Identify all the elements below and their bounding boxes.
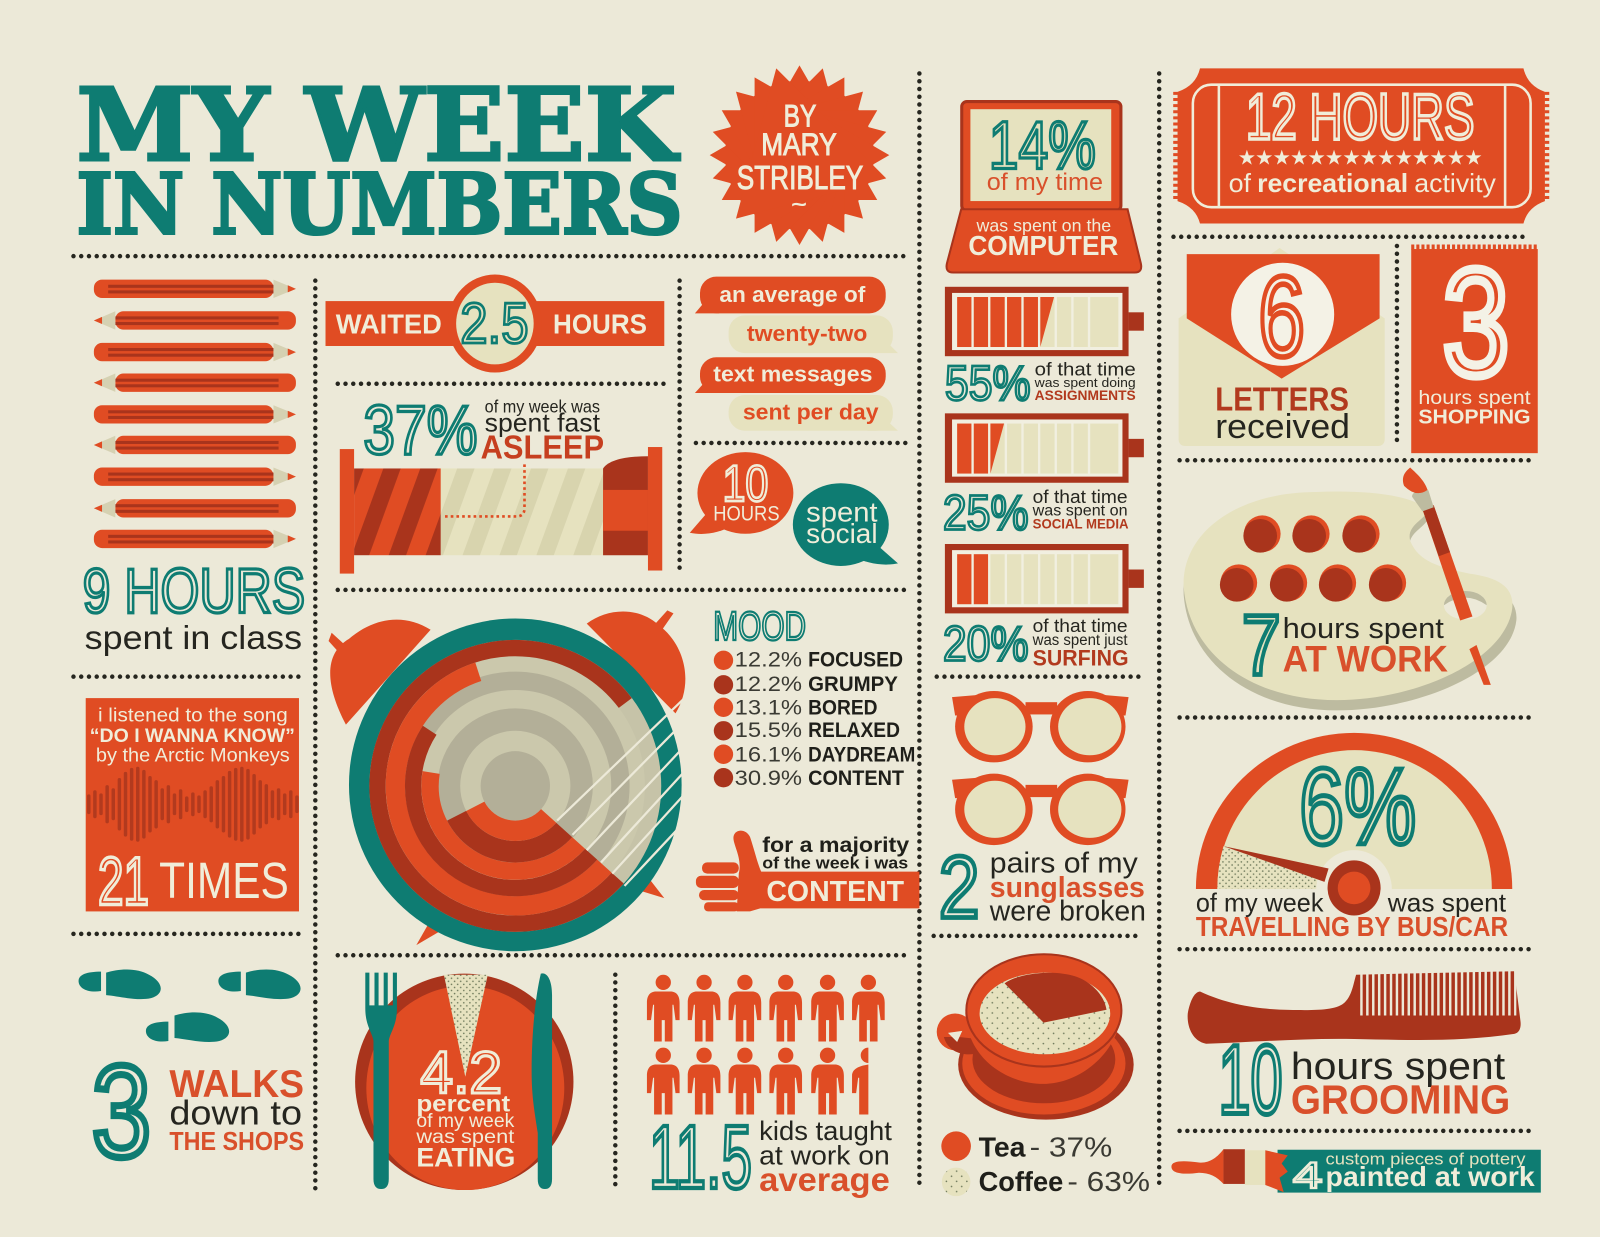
chart: coffee cup tea vs coffee <box>937 954 1134 1120</box>
icon: laptop 14% computer: 14% <box>989 108 1096 183</box>
icon: laptop 14% computer: was spent on the <box>976 216 1111 236</box>
chat bubbles: 10 hours social: 10 <box>722 455 768 512</box>
stat: 7 hours at work: 7 <box>1242 598 1281 694</box>
legend: tea and coffee <box>941 1131 1150 1197</box>
author star badge: BY <box>784 98 816 134</box>
pencils icon row <box>94 280 296 548</box>
legend: tea and coffee: - 63% <box>1067 1166 1150 1197</box>
stat: 9 hours in class: 9 HOURS <box>83 556 305 626</box>
legend: mood: MOOD <box>713 603 806 649</box>
icon: laptop 14% computer <box>947 102 1141 273</box>
legend: mood: BORED <box>808 695 878 719</box>
chat bubbles: text messages: sent per day <box>743 399 879 424</box>
legend: mood: DAYDREAM <box>808 742 915 766</box>
legend: mood: RELAXED <box>808 718 900 742</box>
icon: laptop 14% computer: COMPUTER <box>968 230 1118 261</box>
battery 20% surfing: 20% <box>943 617 1029 671</box>
icon: bed <box>340 447 662 574</box>
envelope: 6 letters <box>1179 248 1385 446</box>
thumbs up content callout: of the week i was <box>762 855 908 873</box>
banner: waited 2.5 hours: 2.5 <box>460 292 529 356</box>
banner: waited 2.5 hours: HOURS <box>553 309 647 340</box>
icon: paint brush on palette <box>1403 467 1491 685</box>
sound wave <box>89 769 297 840</box>
stat: 2 sunglasses <box>939 839 1146 937</box>
receipt: 3 hours shopping: hours spent <box>1418 387 1531 409</box>
title: MY WEEK <box>77 66 680 184</box>
banner: waited 2.5 hours: WAITED <box>336 309 442 340</box>
chart: speedometer 6% travelling: of my week <box>1196 889 1324 917</box>
battery 20% surfing: was spent just <box>1032 632 1128 649</box>
icon: sunglasses <box>952 691 1129 845</box>
stat: 11.5 kids: 11.5 <box>649 1108 752 1208</box>
banner: paintbrush pottery <box>1171 1149 1541 1196</box>
banner: paintbrush pottery: custom pieces of pottery <box>1326 1151 1526 1169</box>
stat: 2 sunglasses: pairs of my <box>990 848 1139 880</box>
battery 20% surfing: of that time <box>1033 615 1128 636</box>
thumbs up content callout <box>696 831 919 911</box>
plate with 4.2 percent eating: of my week <box>416 1110 515 1132</box>
title <box>77 66 683 254</box>
battery 55% assignments: ASSIGNMENTS <box>1035 388 1136 404</box>
stat: 3 walks: 3 <box>92 1038 151 1184</box>
stat: 11.5 kids: at work on <box>759 1141 890 1171</box>
envelope: 6 letters: LETTERS <box>1215 381 1349 418</box>
chat bubbles: 10 hours social: social <box>806 518 878 549</box>
stat: 3 walks: THE SHOPS <box>169 1128 304 1156</box>
legend: mood: 13.1% <box>735 695 802 719</box>
author star badge: ~ <box>792 196 806 214</box>
receipt: 3 hours shopping <box>1411 239 1538 453</box>
panel: song: i listened to the song <box>98 705 288 727</box>
plate with 4.2 percent eating: EATING <box>416 1143 515 1173</box>
battery 55% assignments: was spent doing <box>1034 375 1136 390</box>
ticket: 12 hours recreational: of <box>1229 170 1252 198</box>
banner: paintbrush pottery: 4 <box>1293 1155 1322 1196</box>
author star badge: MARY <box>761 126 837 162</box>
envelope: 6 letters: 6 <box>1258 254 1305 381</box>
title: IN NUMBERS <box>77 155 683 254</box>
stat: 10 hours grooming: GROOMING <box>1291 1077 1510 1123</box>
stat: 3 walks <box>92 1038 304 1184</box>
chat bubbles: 10 hours social: HOURS <box>713 502 780 526</box>
stat: 37% asleep heading: of my week was <box>485 396 600 416</box>
plate with 4.2 percent eating <box>355 973 573 1190</box>
battery 20% surfing <box>943 544 1144 671</box>
stat: 37% asleep heading: spent fast <box>485 410 600 438</box>
battery 25% social media: was spent on <box>1032 502 1128 519</box>
legend: mood: 12.2% <box>735 647 802 671</box>
ticket: 12 hours recreational: 12 HOURS <box>1246 80 1474 153</box>
plate with 4.2 percent eating: was spent <box>415 1126 515 1148</box>
banner: waited 2.5 hours <box>326 275 664 373</box>
battery 55% assignments <box>945 287 1144 411</box>
stat: 3 walks: WALKS <box>169 1063 304 1106</box>
receipt: 3 hours shopping: 3 <box>1443 239 1509 408</box>
author star badge <box>710 37 918 254</box>
chart: speedometer 6% travelling <box>1196 733 1512 942</box>
panel: song: “DO I WANNA KNOW” <box>90 725 295 747</box>
stat: 37% asleep heading: ASLEEP <box>481 429 604 466</box>
chart: speedometer 6% travelling: TRAVELLING BY BUS/CAR <box>1196 911 1508 942</box>
chat bubbles: text messages <box>695 277 898 431</box>
stat: 37% asleep heading <box>363 391 604 469</box>
legend: mood: CONTENT <box>808 766 904 790</box>
battery 25% social media: SOCIAL MEDIA <box>1033 517 1129 533</box>
icon: knife <box>532 973 552 1189</box>
stat: 10 hours grooming: 10 <box>1218 1024 1283 1135</box>
battery 55% assignments: 55% <box>945 357 1031 411</box>
stat: 2 sunglasses: sunglasses <box>990 872 1145 904</box>
plate with 4.2 percent eating: 4.2 <box>420 1039 502 1106</box>
envelope: 6 letters: received <box>1215 408 1350 446</box>
legend: mood: FOCUSED <box>808 647 903 671</box>
panel: song <box>86 698 299 919</box>
stat: 2 sunglasses: 2 <box>939 839 980 937</box>
legend: tea and coffee: Tea <box>979 1131 1026 1162</box>
stat: 7 hours at work <box>1242 598 1448 694</box>
stat: 3 walks: down to <box>169 1095 302 1133</box>
stat: 11.5 kids <box>649 1108 892 1208</box>
stat: 10 hours grooming: hours spent <box>1291 1045 1506 1087</box>
receipt: 3 hours shopping: SHOPPING <box>1418 407 1531 429</box>
legend: mood: GRUMPY <box>808 672 898 696</box>
battery 25% social media: of that time <box>1033 486 1128 507</box>
stat: 9 hours in class: spent in class <box>85 620 302 657</box>
panel: song: TIMES <box>159 852 289 909</box>
legend: tea and coffee: Coffee <box>979 1166 1063 1197</box>
stat: 2 sunglasses: were broken <box>989 896 1146 928</box>
legend: tea and coffee: - 37% <box>1030 1131 1112 1162</box>
thumbs up content callout: CONTENT <box>766 876 905 908</box>
legend: mood: 30.9% <box>735 766 802 790</box>
icon: paint palette <box>1184 467 1516 710</box>
icon: fork <box>365 973 397 1189</box>
chart: speedometer 6% travelling: was spent <box>1387 889 1506 917</box>
stat: 37% asleep heading: 37% <box>363 391 478 469</box>
ticket: 12 hours recreational: recreational <box>1257 170 1408 198</box>
chat bubbles: 10 hours social: spent <box>806 497 878 528</box>
battery 55% assignments: of that time <box>1035 359 1136 380</box>
stat: 11.5 kids: average <box>759 1162 890 1199</box>
legend: mood: 16.1% <box>735 742 802 766</box>
icon: footprints <box>79 969 301 1042</box>
ticket: 12 hours recreational <box>1176 68 1547 224</box>
panel: song: by the Arctic Monkeys <box>96 744 290 766</box>
author star badge: STRIBLEY <box>737 160 863 197</box>
clock bells and feet <box>329 610 685 945</box>
legend: mood <box>713 603 915 790</box>
chat bubbles: text messages: text messages <box>713 362 872 387</box>
panel: song: 21 <box>98 844 149 919</box>
ticket: 12 hours recreational: activity <box>1414 170 1496 198</box>
icon: comb <box>1188 971 1521 1044</box>
battery 25% social media: 25% <box>943 487 1029 541</box>
chart: alarm clock mood pie <box>329 610 715 951</box>
icon: kids pictogram <box>647 975 885 1115</box>
battery 20% surfing: SURFING <box>1033 645 1129 670</box>
stat: 10 hours grooming <box>1218 1024 1510 1135</box>
thumbs up content callout: for a majority <box>762 833 909 857</box>
legend: mood: 12.2% <box>735 672 802 696</box>
stat: 11.5 kids: kids taught <box>759 1116 892 1146</box>
banner: paintbrush pottery: painted at work <box>1326 1161 1535 1192</box>
chat bubbles: text messages: twenty-two <box>747 321 867 346</box>
battery 25% social media <box>943 413 1144 541</box>
chat bubbles: text messages: an average of <box>719 282 866 307</box>
stat: 7 hours at work: AT WORK <box>1283 639 1448 680</box>
ticket: 12 hours recreational: ★★★★★★★★★★★★★★ <box>1238 145 1483 169</box>
stat: 7 hours at work: hours spent <box>1283 613 1444 645</box>
chart: speedometer 6% travelling: 6% <box>1299 746 1416 867</box>
stat: 9 hours in class <box>83 556 305 657</box>
plate with 4.2 percent eating: percent <box>416 1090 510 1116</box>
icon: laptop 14% computer: of my time <box>987 169 1103 196</box>
legend: mood: 15.5% <box>735 718 802 742</box>
chat bubbles: 10 hours social <box>690 452 898 566</box>
